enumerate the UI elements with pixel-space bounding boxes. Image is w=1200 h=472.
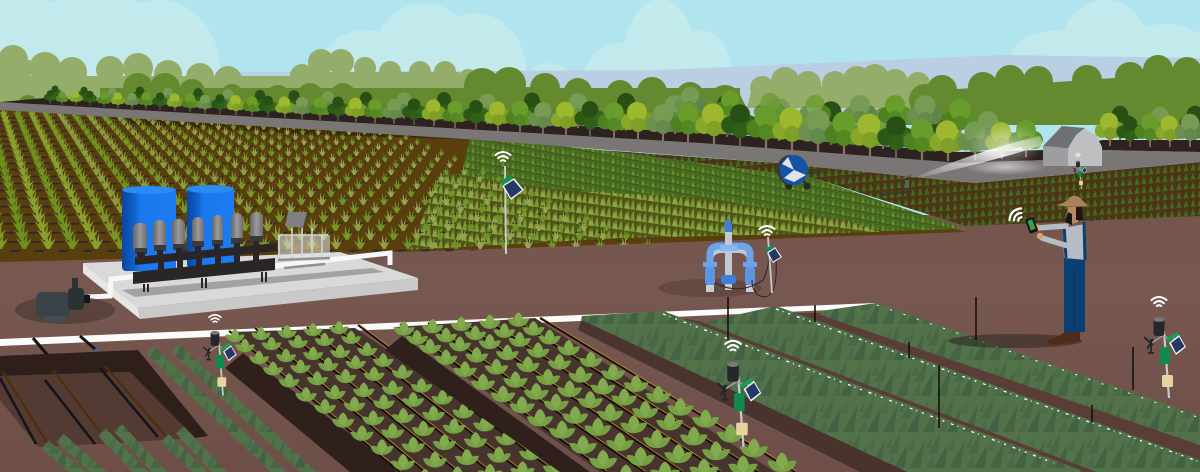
barn sensor	[1073, 154, 1087, 189]
valve shadow	[658, 279, 762, 297]
valve sensor station	[715, 226, 782, 297]
electric pump motor	[36, 278, 90, 322]
grass bed 1	[582, 313, 1080, 472]
black manifold	[133, 241, 277, 292]
grass bed 2	[710, 308, 1200, 472]
clouds	[0, 0, 1200, 140]
sensor station center	[717, 341, 761, 447]
sprinkler spray	[918, 123, 1047, 178]
blue valve assembly	[703, 218, 757, 292]
soil shadow under road	[95, 112, 480, 140]
vegetable bed 2	[385, 312, 797, 472]
corn rows	[0, 106, 653, 252]
farmer shadow	[948, 334, 1082, 348]
corn field soil	[0, 105, 965, 262]
barn	[1043, 126, 1102, 166]
soil strip under trees	[0, 98, 1200, 163]
white platform pipes	[88, 253, 390, 297]
blue filter tanks	[122, 185, 234, 271]
soil channels	[578, 313, 1200, 472]
farmer	[1025, 196, 1088, 345]
road	[0, 102, 1200, 183]
sensor station right	[1144, 297, 1186, 398]
sky	[0, 0, 1200, 130]
light green crop zone	[410, 172, 880, 250]
phone wifi signal	[1007, 206, 1026, 225]
front orchard layer	[44, 90, 1200, 161]
pump platform	[83, 252, 418, 319]
fertigation controller	[278, 212, 330, 268]
white main pipe	[0, 303, 876, 346]
pump shadow	[15, 296, 115, 324]
gray filters	[133, 212, 263, 254]
back orchard layer	[49, 86, 1200, 152]
green crop field	[460, 138, 965, 236]
small field sensor	[880, 175, 912, 198]
grass bed 3	[821, 305, 1200, 443]
hose reel irrigator	[777, 155, 822, 190]
foreground grass strips	[45, 348, 315, 472]
vegetable bed 1	[225, 321, 567, 472]
moisture sensor posts	[728, 297, 1133, 428]
far right crop field	[600, 150, 1200, 226]
sensor station left	[203, 315, 237, 396]
dark green hills	[18, 55, 1200, 125]
lateral pipes	[0, 336, 97, 359]
ground	[0, 215, 1200, 472]
sensor station in corn field	[496, 152, 524, 254]
distant blue hills	[225, 55, 1200, 120]
light green hills	[0, 45, 935, 112]
trench	[0, 350, 208, 447]
